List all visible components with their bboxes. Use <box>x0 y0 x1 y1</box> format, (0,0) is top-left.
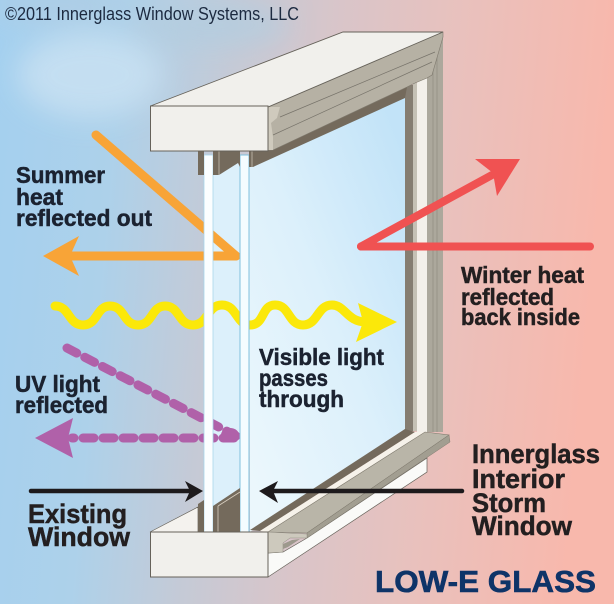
label: visible light passes through: Visible light <box>259 344 384 370</box>
label: winter heat reflected back inside: back inside <box>461 304 580 330</box>
window assembly back <box>213 32 443 532</box>
label: winter heat reflected back inside <box>461 262 584 330</box>
label: visible light passes through: passes <box>259 365 328 391</box>
label: winter heat reflected back inside: Winter heat <box>461 262 584 288</box>
sill end profile <box>268 532 307 553</box>
purple dashed arrow: UV light reflected <box>35 348 239 458</box>
label: visible light passes through: through <box>259 386 344 412</box>
head front face <box>150 106 268 151</box>
label: UV light reflected: UV light <box>15 371 100 397</box>
red arrow: winter heat reflected back inside <box>361 159 590 246</box>
label: innerglass interior storm window: Window <box>472 511 573 541</box>
label: existing window: Window <box>28 522 130 552</box>
label: UV light reflected <box>15 371 108 418</box>
yellow wave arrow: visible light <box>55 303 397 342</box>
label: summer heat reflected out: Summer <box>16 162 105 188</box>
brown sill channel <box>198 429 415 532</box>
head top surface <box>150 32 443 107</box>
label: existing window: Existing <box>28 499 127 529</box>
label: summer heat reflected out: heat <box>16 184 63 210</box>
existing window pane <box>204 155 213 532</box>
label: summer heat reflected out: reflected out <box>16 205 152 231</box>
label: innerglass interior storm window: Storm <box>472 488 546 518</box>
copyright line: ©2011 Innerglass Window Systems, LLC <box>5 3 299 24</box>
top frame <box>150 32 443 175</box>
left white reveal <box>150 507 198 532</box>
cream strip <box>260 432 425 532</box>
label: winter heat reflected back inside: reflected <box>461 284 554 310</box>
molding <box>268 32 443 150</box>
interior storm window pane <box>240 155 249 532</box>
sill front face <box>150 532 268 577</box>
title: LOW-E GLASS: LOW-E GLASS <box>375 564 596 599</box>
brown head channel <box>198 87 407 175</box>
label: existing window <box>28 499 130 552</box>
label: innerglass interior storm window: Innerglass <box>472 439 600 469</box>
white sill body <box>268 458 427 577</box>
sill front edge <box>307 435 450 538</box>
label: visible light passes through <box>259 344 384 412</box>
label: innerglass interior storm window: Interior <box>472 464 565 494</box>
space between panes <box>213 155 240 532</box>
label: innerglass interior storm window <box>472 439 600 541</box>
sky clouds <box>0 0 290 117</box>
bottom frame <box>150 429 450 577</box>
black arrow to existing window <box>31 481 203 502</box>
sill top surface <box>268 432 449 533</box>
glass pane area <box>249 92 405 532</box>
orange arrow: summer heat reflected out <box>43 135 236 276</box>
right jamb <box>405 32 443 432</box>
black arrow to interior storm window <box>259 481 462 503</box>
label: UV light reflected: reflected <box>15 392 108 418</box>
label: summer heat reflected out <box>16 162 152 231</box>
